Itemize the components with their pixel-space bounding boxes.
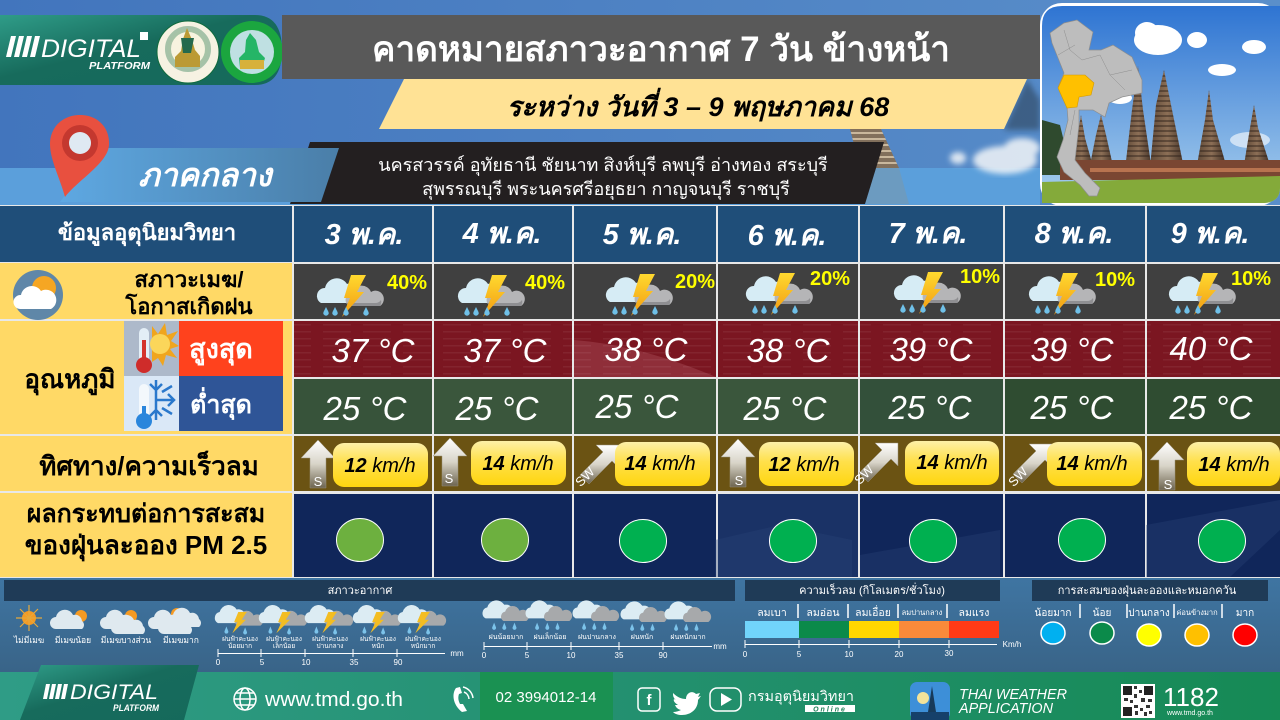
row label: cloud and rain chance: โอกาสเกิดฝน	[124, 293, 253, 319]
icon: facebook	[638, 688, 660, 711]
row label: wind	[0, 436, 292, 491]
table header row: 7 พ.ค.	[889, 218, 967, 250]
row: wind cells: 14 km/h	[624, 453, 696, 475]
icon: cold thermometer	[124, 376, 179, 431]
photo: ancient temple	[1042, 6, 1280, 203]
row: minimum temperature cells: 25 °C	[323, 390, 408, 427]
legend: rain scale: 10	[567, 651, 576, 660]
row: wind cells: S	[314, 474, 323, 489]
row label: wind: ทิศทาง/ความเร็วลม	[39, 450, 259, 481]
table header row: 4 พ.ค.	[462, 218, 541, 250]
legend: thunderstorm scale: เล็กน้อย	[273, 641, 295, 650]
row: minimum temperature cells: 25 °C	[743, 390, 828, 427]
logo: digital platform wordmark: DIGITAL	[41, 35, 141, 63]
legend: wind speed scale: ลมอ่อน	[806, 607, 840, 619]
title bar: คาดหมายสภาวะอากาศ 7 วัน ข้างหน้า	[372, 30, 950, 69]
legend: dust level scale: ปานกลาง	[1128, 608, 1170, 619]
table header row	[0, 206, 1280, 262]
legend: thunderstorm scale	[215, 605, 464, 667]
tmd online label: Online	[813, 706, 847, 714]
legend: sky condition icons: มีเมฆบางส่วน	[101, 635, 151, 645]
legend panel	[0, 578, 1280, 672]
row: minimum temperature cells: 25 °C	[1169, 389, 1254, 426]
row: maximum temperature cells	[294, 321, 1280, 377]
province list panel	[290, 142, 884, 204]
website address: www.tmd.go.th	[264, 689, 403, 711]
legend: rain scale: 5	[525, 651, 530, 660]
legend: thunderstorm scale: ฝนฟ้าคะนอง	[222, 635, 258, 643]
row: maximum temperature cells: 39 °C	[1031, 331, 1115, 368]
table header row: 8 พ.ค.	[1035, 218, 1113, 250]
row: rain chance cells: 10%	[960, 266, 1000, 288]
hotline 1182: 1182	[1163, 682, 1219, 712]
row: rain chance cells: 20%	[675, 271, 715, 293]
row: minimum temperature cells	[294, 379, 1280, 434]
region banner: ภาคกลาง	[138, 157, 274, 193]
legend: dust level scale: น้อยมาก	[1035, 607, 1071, 619]
seal: meteorological department	[221, 21, 283, 83]
legend: rain scale: 90	[659, 651, 668, 660]
province list panel: สุพรรณบุรี พระนครศรีอยุธยา กาญจนบุรี ราชบุรี	[422, 179, 790, 200]
legend: wind speed scale: ลมแรง	[959, 607, 989, 619]
row: rain chance cells: 10%	[1095, 269, 1135, 291]
legend: dust level scale: ค่อนข้างมาก	[1176, 608, 1218, 617]
row: wind cells: SW	[1005, 464, 1031, 490]
date banner	[379, 79, 1027, 129]
map: thailand with central region highlighted	[1050, 20, 1142, 196]
footer bar	[0, 665, 1280, 720]
legend: sky condition icons: มีเมฆน้อย	[55, 635, 91, 645]
legend: rain scale: ฝนเล็กน้อย	[534, 632, 566, 641]
label: minimum temperature: ต่ำสุด	[190, 387, 252, 421]
legend: dust level scale: น้อย	[1093, 607, 1111, 619]
table header row: 9 พ.ค.	[1171, 218, 1249, 250]
legend: dust level scale: มาก	[1236, 608, 1254, 619]
label: maximum temperature	[179, 321, 283, 376]
row: maximum temperature cells: 38 °C	[605, 331, 689, 368]
row: rain chance cells: 40%	[525, 272, 565, 294]
legend: thunderstorm scale: น้อยมาก	[228, 642, 252, 650]
legend: thunderstorm scale: ฝนฟ้าคะนอง	[360, 635, 396, 643]
legend: rain scale: 0	[482, 651, 487, 660]
row: rain chance cells: 10%	[1231, 268, 1271, 290]
legend: wind speed scale: ลมปานกลาง	[902, 608, 943, 617]
legend: wind speed scale: ลมเอื่อย	[855, 605, 891, 619]
legend heading: dust accumulation: การสะสมของฝุ่นละอองและหมอกควัน	[1058, 585, 1237, 597]
photo and map panel	[1040, 3, 1280, 206]
row: rain chance cells: 20%	[810, 268, 850, 290]
legend heading: wind speed: ความเร็วลม (กิโลเมตร/ชั่วโมง)	[799, 582, 945, 597]
row: rain chance cells: 40%	[387, 272, 427, 294]
legend: sky condition icons: มีเมฆมาก	[163, 635, 199, 645]
row label: pm 2.5 impact: ของฝุ่นละออง PM 2.5	[25, 530, 267, 562]
row: pm 2.5 cells	[294, 494, 1280, 577]
qr code	[1121, 684, 1155, 718]
phone number block: 02 3994012-14	[496, 689, 596, 706]
icon: hot thermometer	[124, 321, 179, 376]
legend heading: dust accumulation	[1032, 580, 1268, 601]
legend: thunderstorm scale: mm	[450, 649, 464, 658]
province list panel: นครสวรรค์ อุทัยธานี ชัยนาท สิงห์บุรี ลพบุรี อ่างทอง สระบุรี	[378, 155, 828, 176]
legend: thunderstorm scale: 0	[216, 658, 221, 667]
date banner shadow	[1004, 79, 1040, 130]
icon: globe	[234, 688, 256, 710]
phone number block	[480, 672, 613, 720]
legend: wind speed scale	[743, 604, 1021, 659]
legend: wind speed scale: 20	[895, 650, 904, 659]
background clouds	[950, 138, 1040, 174]
row: wind cells: SW	[572, 464, 598, 490]
legend: thunderstorm scale: ปานกลาง	[317, 643, 343, 650]
app name: APPLICATION	[958, 701, 1054, 717]
logo: digital platform wordmark	[6, 32, 151, 72]
footer logo: digital platform: DIGITAL	[70, 681, 158, 704]
icon: map pin	[50, 115, 109, 197]
legend: sky condition icons: ไม่มีเมฆ	[13, 635, 44, 645]
hotline 1182: www.tmd.go.th	[1166, 710, 1213, 717]
row: maximum temperature cells: 38 °C	[747, 332, 831, 369]
lighter horizon band	[0, 168, 1040, 205]
row: minimum temperature cells: 25 °C	[595, 388, 680, 425]
legend heading: weather conditions: สภาวะอากาศ	[328, 585, 392, 597]
row: wind cells: 14 km/h	[916, 452, 988, 474]
label: minimum temperature	[179, 376, 283, 431]
legend: rain scale: ฝนหนักมาก	[670, 633, 706, 641]
background stupa	[850, 129, 909, 204]
legend: rain scale: 35	[615, 651, 624, 660]
row: wind cells: S	[735, 473, 744, 488]
row label: temperature	[0, 321, 292, 434]
app name	[958, 687, 1068, 717]
seal: ministry of digital economy	[157, 21, 219, 83]
footer logo: digital platform	[20, 665, 199, 720]
row: wind cells: 12 km/h	[768, 454, 840, 476]
row: minimum temperature cells: 25 °C	[888, 389, 973, 426]
icon: twitter	[673, 692, 701, 715]
weather table	[0, 205, 1280, 578]
tmd online label	[748, 688, 855, 714]
icon: sun and cloud badge	[13, 270, 63, 320]
row: wind cells: 14 km/h	[1056, 453, 1128, 475]
table header row: 3 พ.ค.	[325, 219, 403, 251]
legend: rain scale: ฝนหนัก	[631, 633, 653, 641]
row: minimum temperature cells: 25 °C	[455, 390, 540, 427]
logo panel: digital platform and seals	[0, 15, 283, 85]
app name: THAI WEATHER	[959, 687, 1068, 703]
table header row: ข้อมูลอุตุนิยมวิทยา	[58, 220, 236, 247]
legend: rain scale: ฝนปานกลาง	[578, 634, 616, 641]
legend: wind speed scale: 30	[945, 649, 954, 658]
legend: thunderstorm scale: 35	[350, 658, 359, 667]
row label: cloud and rain chance: สภาวะเมฆ/	[135, 267, 243, 292]
region banner	[60, 148, 339, 202]
legend: thunderstorm scale: 90	[394, 658, 403, 667]
row: maximum temperature cells: 39 °C	[890, 331, 974, 368]
row: maximum temperature cells: 40 °C	[1170, 330, 1254, 367]
row: minimum temperature cells: 25 °C	[1030, 389, 1115, 426]
legend heading: wind speed	[745, 580, 1000, 601]
footer logo: digital platform: PLATFORM	[113, 703, 159, 713]
legend: wind speed scale: 0	[743, 650, 748, 659]
icon: facebook: f	[646, 692, 652, 709]
date banner: ระหว่าง วันที่ 3 – 9 พฤษภาคม 68	[507, 87, 889, 122]
legend: rain scale	[482, 600, 727, 660]
table header row: 5 พ.ค.	[603, 219, 681, 251]
row: wind cells	[294, 436, 1280, 492]
row: wind cells: 14 km/h	[482, 453, 554, 475]
legend: thunderstorm scale: ฝนฟ้าคะนอง	[405, 635, 441, 643]
legend: dust level scale	[1035, 604, 1257, 646]
legend: thunderstorm scale: หนัก	[372, 642, 384, 650]
row label: pm 2.5 impact	[0, 493, 292, 577]
icon: youtube	[710, 688, 741, 711]
row: wind cells: S	[1164, 477, 1173, 492]
row: wind cells: 12 km/h	[344, 455, 416, 477]
row label: pm 2.5 impact: ผลกระทบต่อการสะสม	[27, 500, 265, 528]
legend: rain scale: mm	[713, 642, 727, 651]
legend: rain scale: ฝนน้อยมาก	[489, 633, 523, 641]
legend: wind speed scale: 10	[845, 650, 854, 659]
tmd online label: กรมอุตุนิยมวิทยา	[748, 688, 854, 705]
icon: phone	[454, 687, 473, 712]
legend: wind speed scale: ลมเบา	[757, 607, 787, 619]
legend: thunderstorm scale: 5	[260, 658, 265, 667]
row label: temperature: อุณหภูมิ	[24, 364, 116, 396]
row: maximum temperature cells: 37 °C	[332, 332, 416, 369]
legend: wind speed scale: Km/h	[1003, 640, 1021, 649]
legend: thunderstorm scale: ฝนฟ้าคะนอง	[312, 635, 348, 643]
legend: thunderstorm scale: หนักมาก	[411, 642, 435, 650]
title bar	[282, 15, 1040, 79]
legend: thunderstorm scale: ฝนฟ้าคะนอง	[266, 635, 302, 643]
legend: wind speed scale: 5	[797, 650, 802, 659]
icon: thai weather application	[910, 682, 950, 720]
logo: digital platform wordmark: PLATFORM	[89, 61, 151, 72]
legend heading: weather conditions	[4, 580, 735, 601]
legend: sky condition icons	[13, 605, 201, 645]
row: maximum temperature cells: 37 °C	[464, 332, 548, 369]
row: wind cells: S	[445, 471, 454, 486]
legend: thunderstorm scale: 10	[302, 658, 311, 667]
row: rain chance cells	[294, 264, 1280, 319]
label: maximum temperature: สูงสุด	[189, 334, 253, 366]
row: wind cells: 14 km/h	[1198, 454, 1270, 476]
row: wind cells: SW	[851, 462, 877, 488]
table header row: 6 พ.ค.	[748, 220, 826, 252]
row label: cloud and rain chance	[0, 263, 292, 320]
